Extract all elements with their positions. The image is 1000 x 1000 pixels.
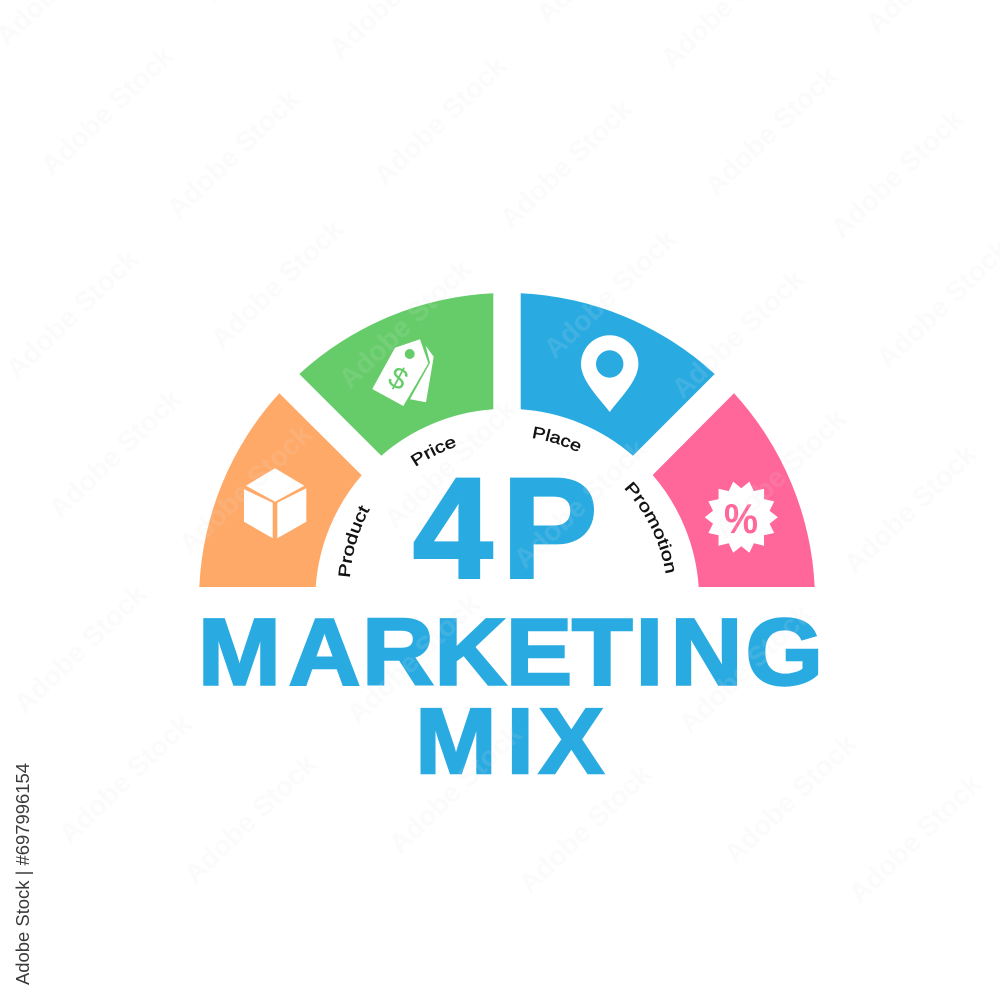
watermark pattern: Adobe Stock — [494, 93, 639, 234]
watermark pattern: Adobe Stock — [508, 433, 653, 574]
label: Place: Place — [532, 426, 580, 452]
icon: box — [244, 468, 306, 538]
watermark pattern: Adobe Stock — [53, 708, 198, 849]
icon: price tag — [372, 339, 434, 406]
watermark pattern: Adobe Stock — [43, 383, 188, 524]
heading: 4P: 4P — [413, 450, 597, 608]
watermark pattern: Adobe Stock — [513, 758, 658, 899]
stock id text: Adobe Stock | #697996154 — [13, 763, 33, 985]
watermark pattern: Adobe Stock — [825, 103, 970, 244]
label: Promotion: Promotion — [624, 482, 674, 574]
watermark pattern: Adobe Stock — [333, 253, 478, 394]
icon: discount badge — [705, 482, 778, 553]
watermark pattern: Adobe Stock — [718, 728, 863, 869]
panel: price segment — [299, 293, 493, 456]
panel: promotion segment — [653, 393, 815, 587]
watermark pattern: Adobe Stock — [673, 598, 818, 739]
watermark pattern: Adobe Stock — [699, 60, 844, 201]
label: Product: Product — [338, 505, 370, 577]
watermark pattern: Adobe Stock — [161, 83, 306, 224]
watermark pattern: Adobe Stock — [205, 213, 350, 354]
watermark pattern: Adobe Stock — [173, 418, 318, 559]
watermark pattern: Adobe Stock — [178, 748, 323, 889]
watermark pattern: Adobe Stock — [368, 50, 513, 191]
panel: place segment — [521, 293, 715, 456]
heading: MARKETING: MARKETING — [198, 599, 823, 705]
icon: discount badge: % — [724, 495, 758, 542]
watermark pattern: Adobe Stock — [378, 393, 523, 534]
panel: product segment — [199, 393, 362, 587]
watermark pattern: Adobe Stock — [35, 40, 180, 181]
watermark pattern: Adobe Stock — [666, 263, 811, 404]
icon: price tag: $ — [383, 360, 413, 398]
watermark pattern: Adobe Stock — [538, 223, 683, 364]
watermark pattern: Adobe Stock — [0, 243, 145, 384]
watermark pattern: Adobe Stock — [383, 718, 528, 859]
heading: MIX: MIX — [415, 690, 604, 794]
watermark pattern: Adobe Stock — [708, 403, 853, 544]
label: Price: Price — [410, 439, 456, 466]
watermark pattern: Adobe Stock — [843, 768, 988, 909]
watermark pattern: Adobe Stock — [341, 588, 486, 729]
icon: location pin — [581, 335, 638, 412]
watermark pattern: Adobe Stock — [8, 578, 153, 719]
watermark pattern: Adobe Stock — [838, 438, 983, 579]
